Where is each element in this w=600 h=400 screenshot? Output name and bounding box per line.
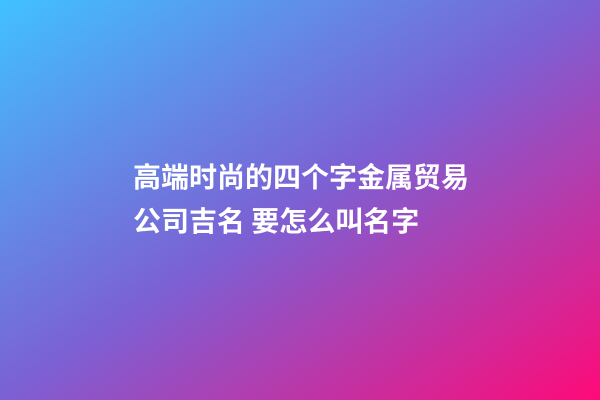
title: 公司吉名 要怎么叫名字 (133, 206, 419, 237)
title: 高端时尚的四个字金属贸易 (133, 162, 469, 193)
title (133, 162, 469, 237)
